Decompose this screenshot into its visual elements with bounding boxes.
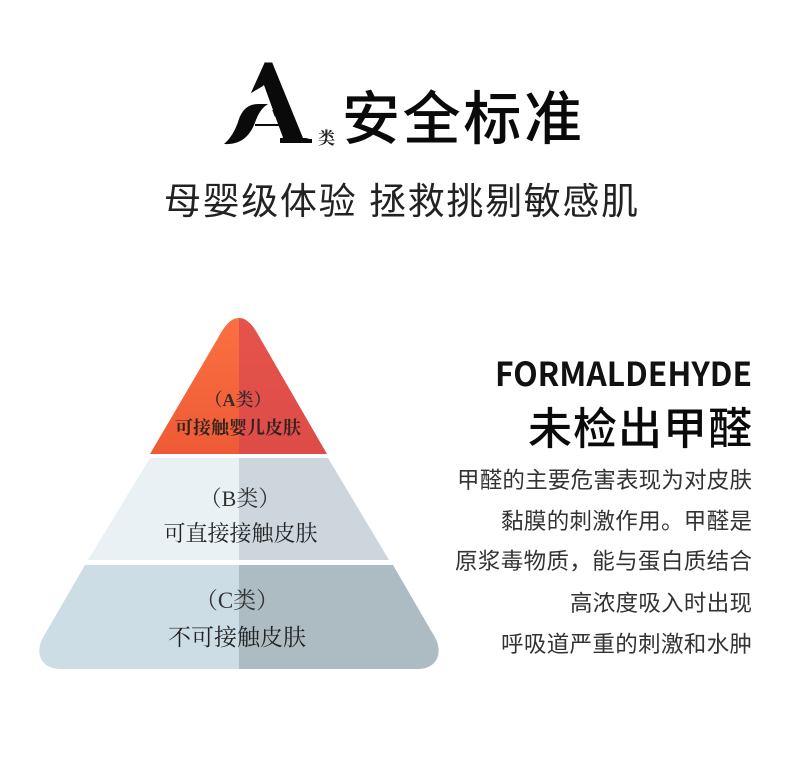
header logo: A类 xyxy=(224,62,335,146)
description text: 原浆毒物质，能与蛋白质结合 xyxy=(455,549,752,574)
tier B: 可直接接触皮肤: 可直接接触皮肤 xyxy=(163,521,318,546)
main title: 安全标准 xyxy=(342,87,582,152)
tier C: 不可接触皮肤 xyxy=(39,565,439,669)
subtitle: 母婴级体验 拯救挑剔敏感肌 xyxy=(164,181,638,222)
logo A details: apex tip, foot serif and crossbar xyxy=(251,62,312,143)
description text: 呼吸道严重的刺激和水肿 xyxy=(501,632,752,657)
tier A: 可接触婴儿皮肤: 可接触婴儿皮肤 xyxy=(175,417,301,438)
logo leaf swoosh xyxy=(224,104,268,144)
description text: 甲醛的主要危害表现为对皮肤 xyxy=(457,468,752,493)
tier C: 不可接触皮肤: （C类） xyxy=(195,588,279,613)
logo letter A: A xyxy=(222,35,310,170)
tier A: 可接触婴儿皮肤 xyxy=(150,318,327,454)
tier A: 可接触婴儿皮肤: （A类） xyxy=(204,390,272,410)
tier B: 可直接接触皮肤 xyxy=(88,458,389,560)
description text: 高浓度吸入时出现 xyxy=(570,591,752,616)
tier B: 可直接接触皮肤: （B类） xyxy=(200,486,280,511)
description text: 黏膜的刺激作用。甲醛是 xyxy=(501,509,752,534)
heading: 未检出甲醛: 未检出甲醛 xyxy=(528,405,752,454)
heading: FORMALDEHYDE: FORMALDEHYDE xyxy=(495,348,752,396)
logo small 类: 类 xyxy=(318,128,335,148)
pyramid chart xyxy=(39,318,439,669)
tier C: 不可接触皮肤: 不可接触皮肤 xyxy=(168,625,306,650)
description text xyxy=(455,468,752,657)
